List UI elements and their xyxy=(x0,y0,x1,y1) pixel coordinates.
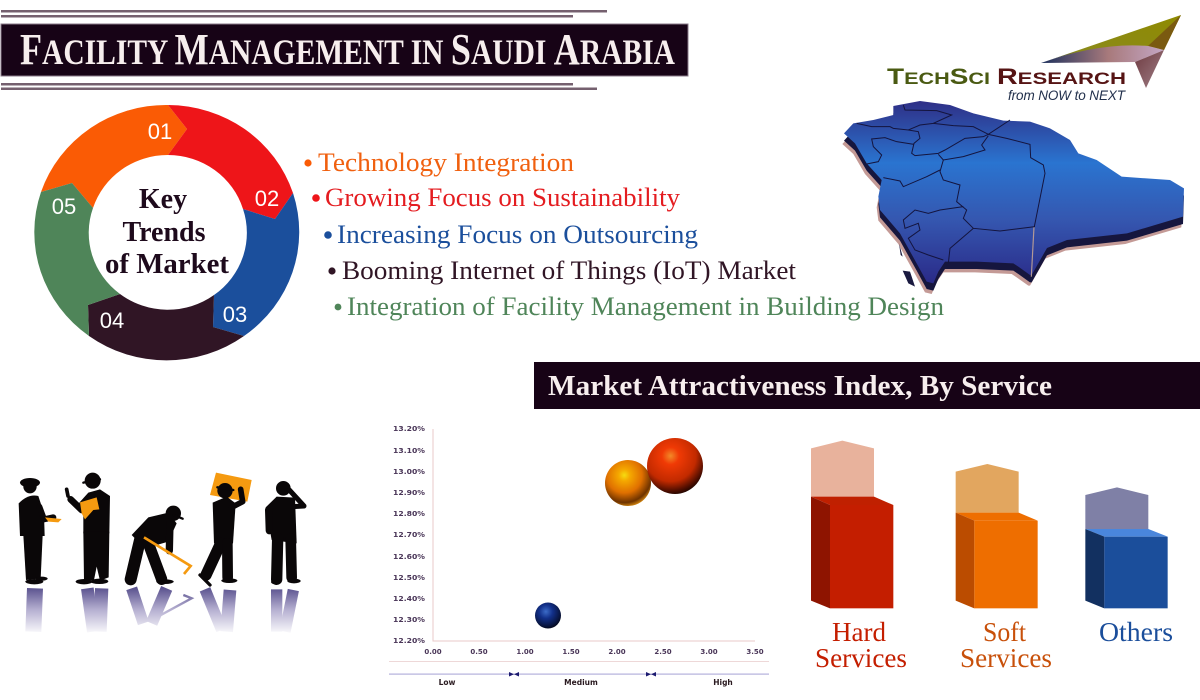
map of Saudi Arabia xyxy=(842,101,1184,294)
worker 3 xyxy=(126,506,183,584)
attractiveness scale: Medium xyxy=(564,678,598,687)
segment 03: 03 xyxy=(223,302,247,327)
bar: soft services xyxy=(956,464,1038,608)
x axis labels: 1.00 xyxy=(516,648,534,656)
reflections xyxy=(33,588,293,632)
logo: R ESEARCH xyxy=(997,64,1126,89)
worker 2 xyxy=(67,473,110,584)
bar: hard services xyxy=(811,441,893,608)
y axis labels: 12.90% xyxy=(393,489,425,497)
section header: market attractiveness xyxy=(534,362,1200,409)
center label: of Market xyxy=(105,249,230,280)
y axis labels: 12.50% xyxy=(393,574,425,582)
bubble: soft services xyxy=(605,460,651,506)
trend 3: Increasing Focus on Outsourcing xyxy=(337,220,698,249)
bar label: soft services: Services xyxy=(960,643,1052,673)
y axis labels: 12.20% xyxy=(393,637,425,645)
title rules top xyxy=(1,10,607,18)
bar label: soft services xyxy=(960,617,1052,673)
segment 01: 01 xyxy=(148,119,172,144)
center label xyxy=(105,184,230,280)
y axis labels: 13.10% xyxy=(393,447,425,455)
bar: others xyxy=(1085,487,1168,608)
y axis labels: 12.80% xyxy=(393,510,425,518)
title: FACILITY MANAGEMENT IN SAUDI ARABIA xyxy=(20,25,675,74)
x axis labels: 3.00 xyxy=(700,648,718,656)
segment 04: 04 xyxy=(100,308,124,333)
worker 4 xyxy=(200,483,243,585)
attractiveness scale: Low xyxy=(439,678,455,687)
title rules bottom xyxy=(1,83,597,90)
section header: market attractiveness: Market Attractiveness Index, By Service xyxy=(548,371,1052,402)
trend 4: Booming Internet of Things (IoT) Market xyxy=(342,256,797,285)
segment 02: 02 xyxy=(255,186,279,211)
worker 4 board xyxy=(210,473,252,502)
donut: key trends xyxy=(34,105,299,360)
logo xyxy=(887,15,1181,103)
bars xyxy=(811,441,1168,608)
worker 5 xyxy=(266,481,304,584)
worker 3 hoe xyxy=(144,537,191,574)
bar label: hard services xyxy=(815,617,907,673)
segment 03 xyxy=(213,193,299,336)
x axis labels: 0.50 xyxy=(470,648,488,656)
axes xyxy=(433,429,755,641)
trend list xyxy=(304,148,944,321)
worker 1 xyxy=(19,478,53,584)
logo mark xyxy=(1041,15,1181,88)
x axis labels: 2.50 xyxy=(654,648,672,656)
bubble chart xyxy=(389,425,769,687)
x axis labels: 1.50 xyxy=(562,648,580,656)
segment 02 xyxy=(168,105,293,219)
center label: Trends xyxy=(122,217,206,248)
bar label: hard services: Services xyxy=(815,643,907,673)
y axis labels: 12.40% xyxy=(393,595,425,603)
y axis labels: 13.20% xyxy=(393,425,425,433)
y axis labels: 12.70% xyxy=(393,531,425,539)
y axis labels xyxy=(393,425,425,645)
trend 5: Integration of Facility Management in Building Design xyxy=(347,292,944,321)
segment 05 xyxy=(34,183,120,336)
bubble: others xyxy=(535,602,561,628)
bubble: hard services xyxy=(647,438,703,494)
attractiveness scale: High xyxy=(713,678,733,687)
bar label: hard services: Hard xyxy=(832,617,886,647)
y axis labels: 12.30% xyxy=(393,616,425,624)
segment 01 xyxy=(41,105,187,208)
x axis labels xyxy=(424,648,764,656)
workers silhouettes xyxy=(19,473,304,632)
x axis labels: 0.00 xyxy=(424,648,442,656)
trend 1: Technology Integration xyxy=(318,148,574,177)
y axis labels: 13.00% xyxy=(393,468,425,476)
center label: Key xyxy=(139,184,187,215)
logo tagline: from NOW to NEXT xyxy=(1008,88,1127,103)
trend 2: Growing Focus on Sustainability xyxy=(325,183,680,212)
segment 05: 05 xyxy=(52,194,76,219)
segment 04 xyxy=(88,294,244,360)
y axis labels: 12.60% xyxy=(393,553,425,561)
x axis labels: 3.50 xyxy=(746,648,764,656)
logo wordmark: TECH SCI xyxy=(887,64,990,89)
attractiveness scale xyxy=(389,661,769,687)
x axis labels: 2.00 xyxy=(608,648,626,656)
bar label: others: Others xyxy=(1099,617,1173,647)
bar label: soft services: Soft xyxy=(983,617,1026,647)
